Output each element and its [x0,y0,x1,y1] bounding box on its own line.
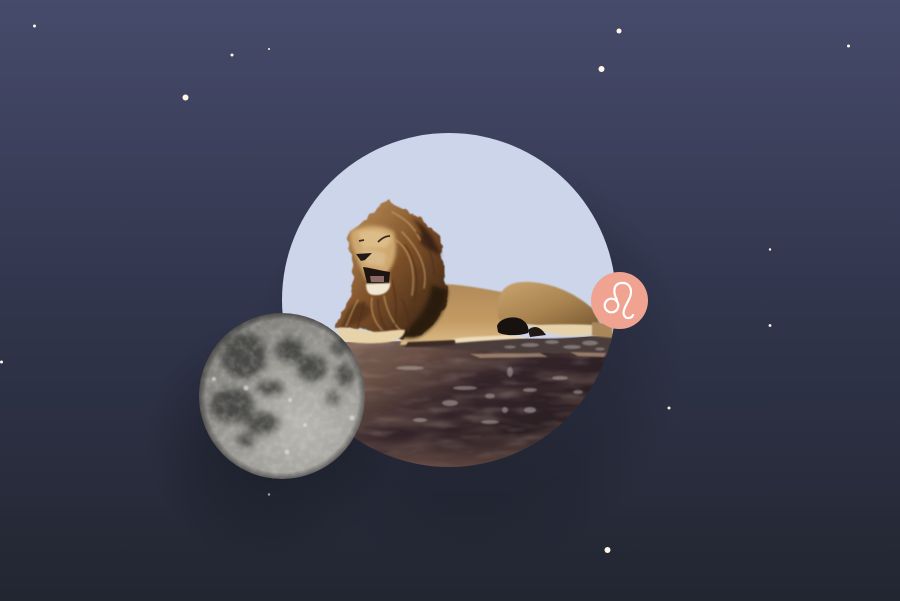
haunch [498,282,600,326]
front paw [337,328,405,343]
icon: Leo symbol [605,283,633,318]
eyes [378,236,390,242]
Leo zodiac badge [591,272,648,329]
moon [199,313,365,479]
mane hair strands [346,212,434,332]
soft drop shadows [145,140,685,570]
rock top ledge [400,336,612,353]
chin [366,283,390,295]
hind leg [525,324,593,336]
body [400,284,512,345]
sky [280,130,620,345]
lion [335,199,613,347]
nose [356,253,372,261]
photo disc: lion on a rock [280,130,620,470]
mane [335,199,448,338]
rock [340,334,620,470]
bright craters [212,377,354,454]
lunar maria [210,333,354,447]
back paw [497,317,529,335]
mouth [363,267,390,284]
face [351,226,396,285]
dark mane shading [412,218,441,256]
pale flecks [396,366,583,424]
